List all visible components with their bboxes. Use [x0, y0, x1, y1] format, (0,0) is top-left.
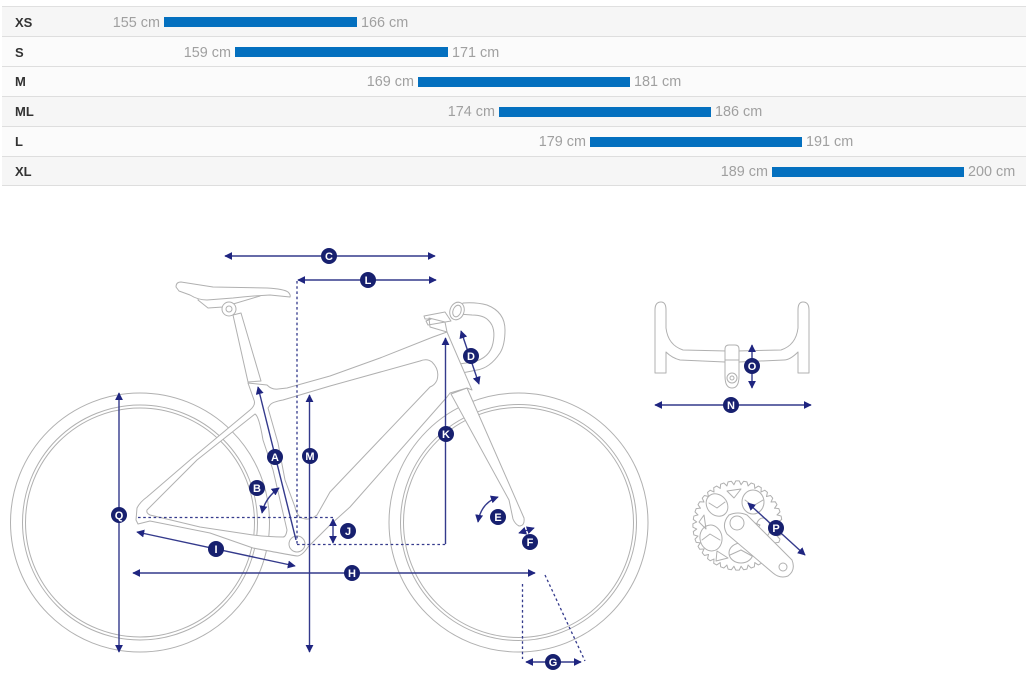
badge L [360, 272, 376, 288]
badge A [267, 449, 283, 465]
row: L: 191 cm [806, 134, 853, 150]
badge J: J [345, 526, 351, 538]
row: S: S [15, 45, 24, 60]
badge B [249, 480, 265, 496]
badge G: G [549, 657, 557, 669]
badge P [768, 520, 784, 536]
crank arm [724, 513, 793, 577]
stem [424, 312, 451, 332]
badge F [522, 534, 538, 550]
badge K [438, 426, 454, 442]
arrow A [258, 387, 296, 540]
arrow D [461, 331, 479, 384]
saddle [176, 282, 290, 316]
arrow L [298, 279, 436, 281]
dimension lines [119, 256, 811, 662]
handlebar side view [449, 303, 505, 375]
arrow O [751, 345, 753, 388]
arrow P [748, 503, 805, 555]
badge H [344, 565, 360, 581]
row: ML: 174 cm [448, 104, 495, 120]
stem clamp [447, 300, 467, 322]
badge E: E [494, 512, 502, 524]
badge J [340, 523, 356, 539]
arrow M [308, 395, 310, 652]
badge D [463, 348, 479, 364]
rear wheel [10, 393, 270, 652]
row: S: 159 cm [184, 45, 231, 61]
row: XL: 189 cm [721, 164, 768, 180]
row: XS: 166 cm [361, 15, 408, 31]
arrow H [133, 572, 535, 574]
seatpost [233, 313, 261, 382]
badge F: F [527, 537, 534, 549]
arrow K [444, 338, 446, 544]
front wheel [389, 393, 648, 652]
row: M: M [15, 74, 26, 89]
badge M [302, 448, 318, 464]
frame [136, 332, 472, 556]
row: XS: 155 cm [113, 15, 160, 31]
arrow C [225, 255, 435, 257]
badge D: D [467, 351, 475, 363]
row: M: 181 cm [634, 74, 681, 90]
badge Q: Q [115, 510, 124, 522]
badge P: P [772, 523, 780, 535]
badge G [545, 654, 561, 670]
badge L: L [365, 275, 372, 287]
arrow E [478, 497, 498, 522]
badge C: C [325, 251, 333, 263]
row: XL: 200 cm [968, 164, 1015, 180]
row: L: 179 cm [539, 134, 586, 150]
row: ML: 186 cm [715, 104, 762, 120]
chainring and crank [693, 481, 793, 577]
row: XL [2, 157, 1026, 186]
arrow N [655, 404, 811, 406]
badge N: N [727, 400, 735, 412]
badge C [321, 248, 337, 264]
row: M: 169 cm [367, 74, 414, 90]
badge O [744, 358, 760, 374]
badge Q [111, 507, 127, 523]
row: XL: XL [15, 164, 32, 179]
row: M [2, 67, 1026, 97]
row: S: 171 cm [452, 45, 499, 61]
badge H: H [348, 568, 356, 580]
row: XS [2, 7, 1026, 37]
arrow F [519, 528, 534, 533]
dashed guides [138, 281, 585, 661]
arrow Q [118, 393, 120, 652]
badge E [490, 509, 506, 525]
row: ML [2, 97, 1026, 127]
badge B: B [253, 483, 261, 495]
handlebar front view [655, 302, 809, 388]
bike drawing [10, 282, 648, 652]
chainring teeth [693, 481, 782, 570]
arrow B [262, 488, 279, 513]
row: ML: ML [15, 104, 34, 119]
row: S [2, 37, 1026, 67]
badge K: K [442, 429, 450, 441]
row: L: L [15, 134, 23, 149]
size table [2, 6, 1026, 186]
arrow I [137, 532, 295, 566]
badge M: M [305, 451, 315, 463]
badge I: I [214, 544, 218, 556]
row: L [2, 127, 1026, 157]
dimension badges [111, 248, 784, 670]
arrow G [526, 661, 581, 663]
badge A: A [271, 452, 279, 464]
row: XS: XS [15, 15, 32, 30]
fork [451, 388, 524, 526]
badge N [723, 397, 739, 413]
badge O: O [748, 361, 757, 373]
chainring cutouts [698, 489, 770, 563]
bottom bracket [289, 536, 305, 552]
badge I [208, 541, 224, 557]
arrow J [332, 519, 334, 543]
